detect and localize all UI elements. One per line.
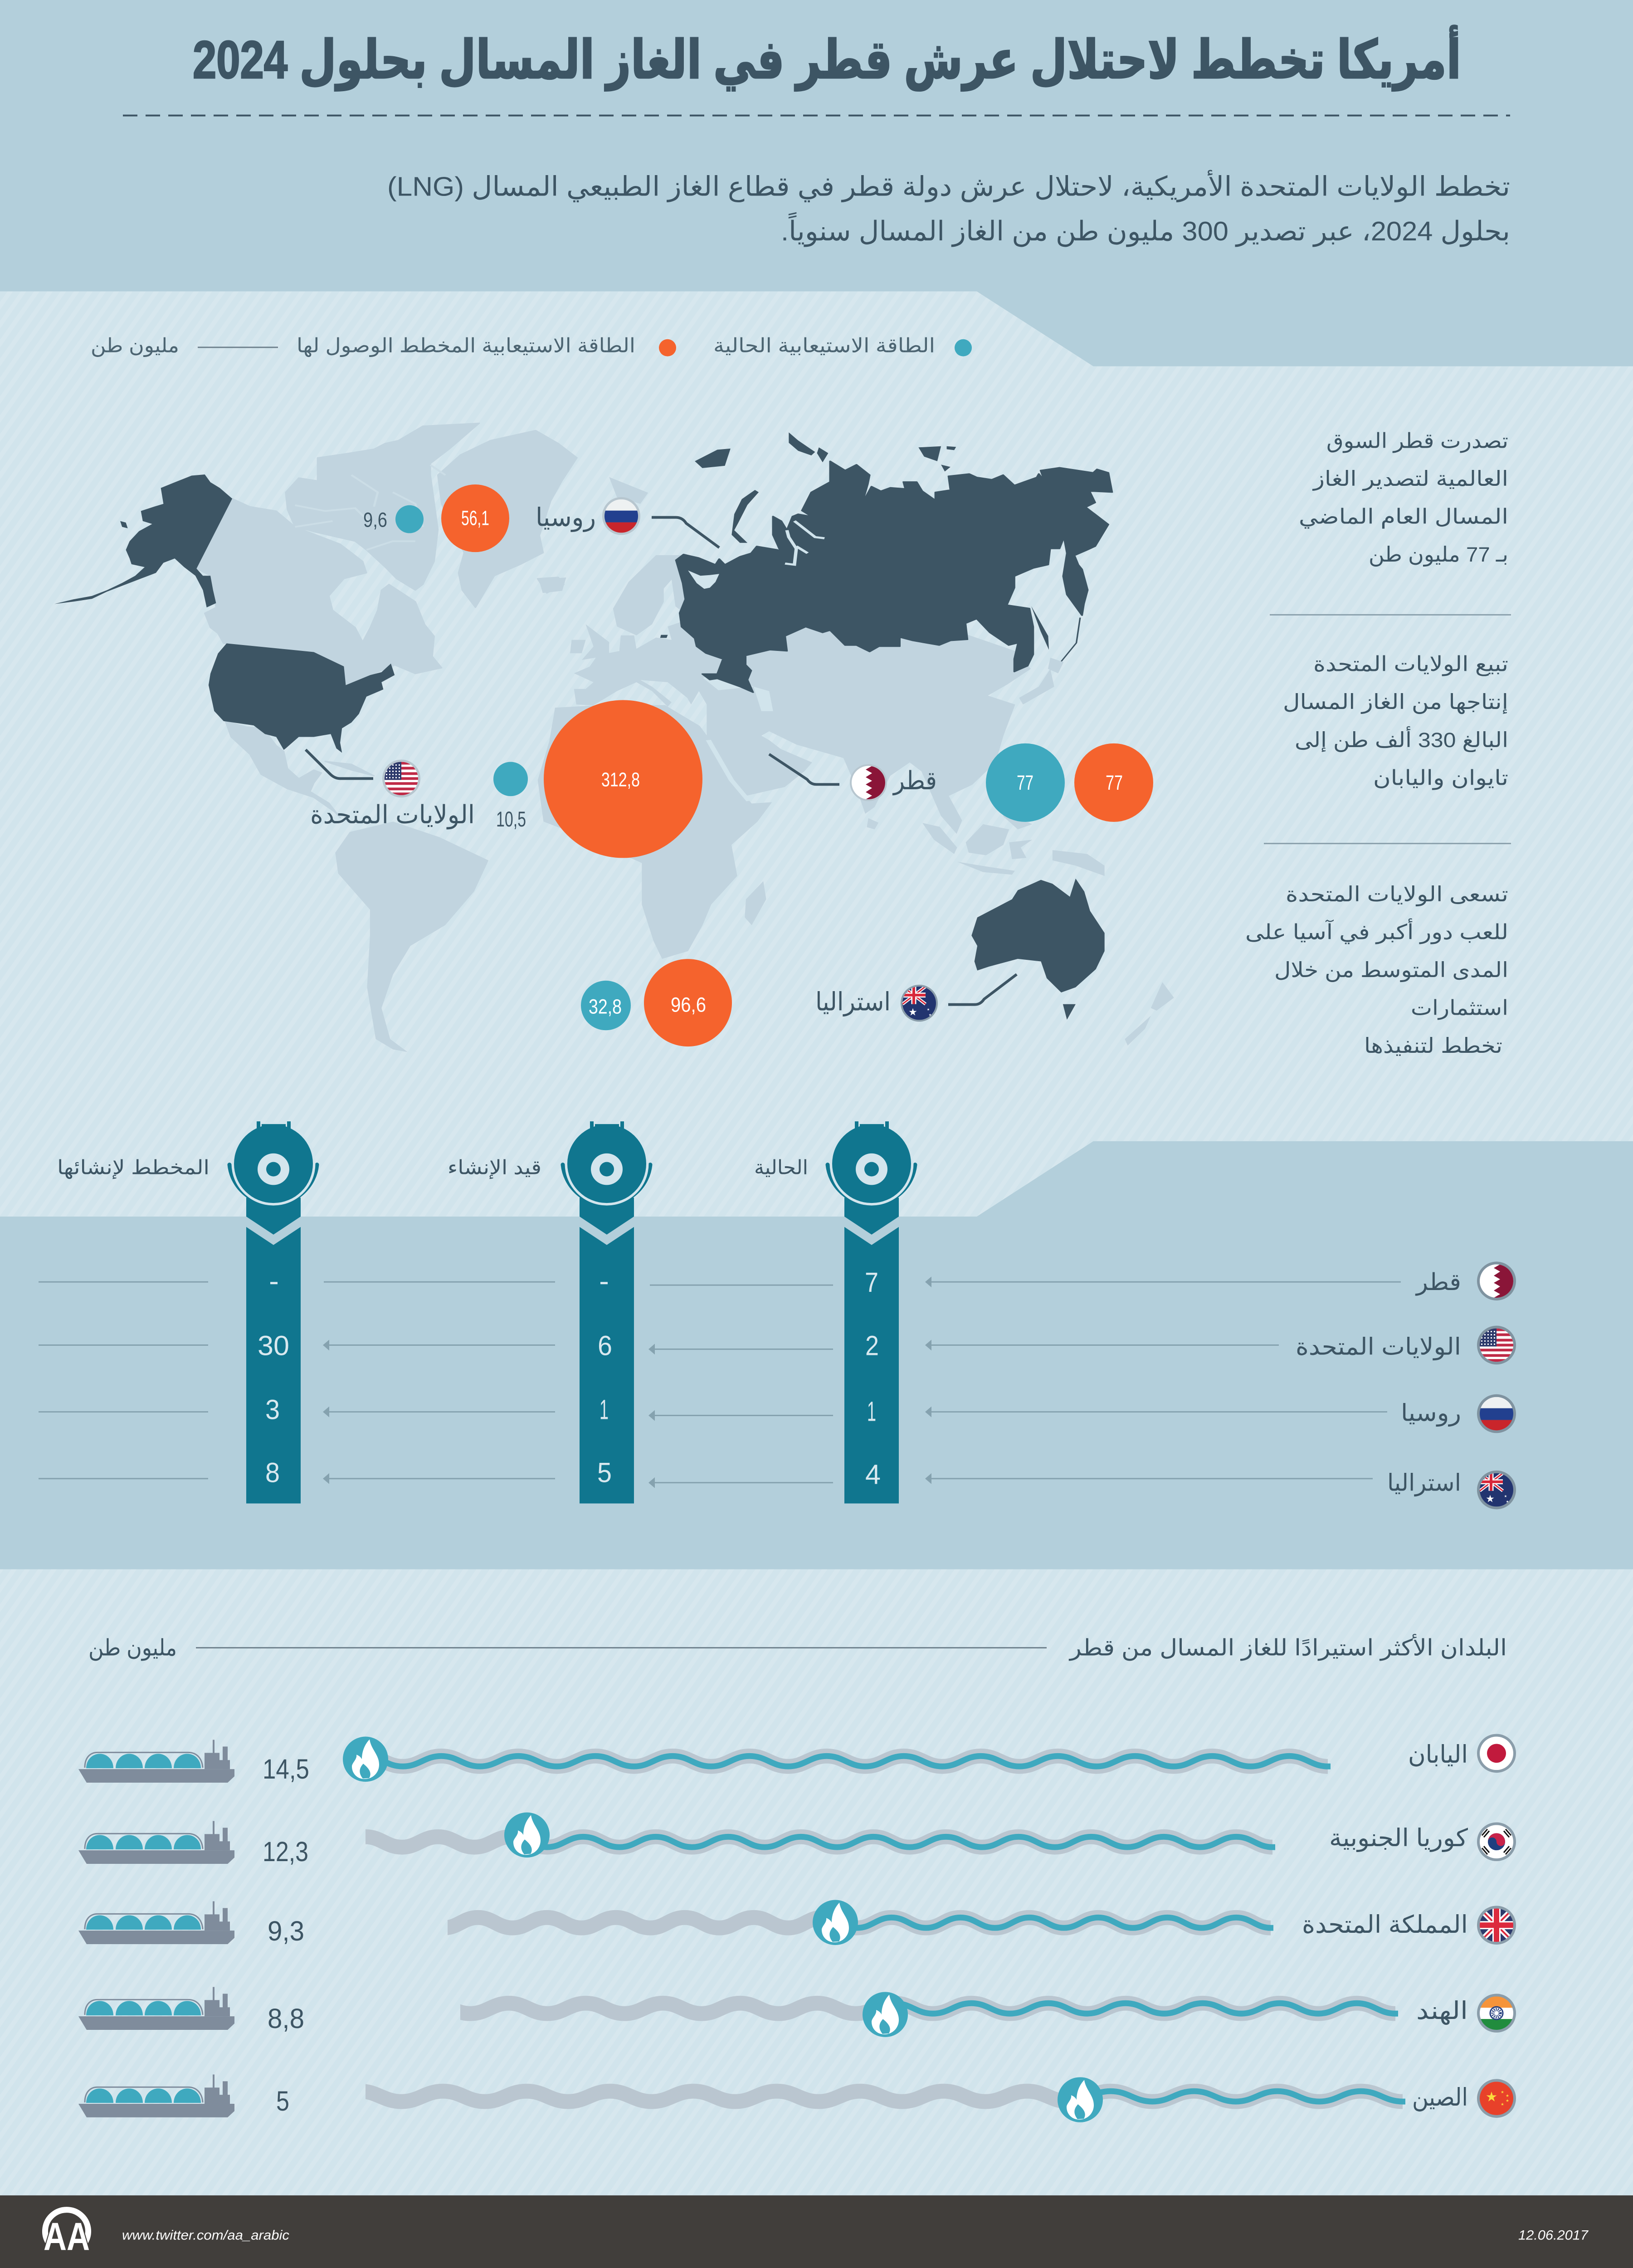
callout: qatar <box>769 743 1153 822</box>
column values <box>258 1267 881 1491</box>
text block: qatar exports: المسال العام الماضي <box>1299 505 1508 529</box>
row: china: الصين <box>1412 2084 1468 2112</box>
text block: us sales: تبيع الولايات المتحدة <box>1313 652 1508 677</box>
footer <box>0 2195 1633 2268</box>
callout: united states: 312,8 <box>601 768 640 791</box>
chart heading: البلدان الأكثر استيرادًا للغاز المسال من قطر <box>1068 1634 1507 1661</box>
country row labels <box>1296 1261 1516 1509</box>
map: light land eurasia <box>539 477 1063 834</box>
text block: us sales: تايوان واليابان <box>1373 766 1508 790</box>
callout: australia: 32,8 <box>589 995 622 1018</box>
column values: 4 <box>865 1459 881 1491</box>
text block: us role in asia: تسعى الولايات المتحدة <box>1286 882 1508 907</box>
row: india <box>78 1987 1516 2037</box>
column values: 1 <box>600 1394 609 1425</box>
text block: qatar exports: بـ 77 مليون طن <box>1369 543 1508 567</box>
text block: us role in asia: تخطط لتنفيذها <box>1364 1034 1502 1057</box>
column values: 3 <box>265 1394 280 1425</box>
column headers: الحالية <box>754 1157 808 1178</box>
text block: qatar exports: تصدرت قطر السوق <box>1326 429 1508 453</box>
map: highlighted russia <box>660 432 1112 692</box>
row: japan <box>78 1734 1516 1785</box>
arrows between columns <box>39 1276 1401 1488</box>
footer date: 12.06.2017 <box>1518 2228 1589 2243</box>
intro text <box>387 170 1510 247</box>
callout: australia <box>581 959 1017 1046</box>
panel: light map area <box>0 291 1633 1217</box>
legend: الطاقة الاستيعابية المخطط الوصول لها <box>297 335 635 357</box>
country row labels: روسيا <box>1401 1400 1461 1427</box>
chart heading <box>88 1634 1507 1661</box>
map: highlighted australia <box>971 879 1105 1020</box>
text block: us role in asia: للعب دور أكبر في آسيا على <box>1245 919 1508 944</box>
intro text: بحلول 2024، عبر تصدير 300 مليون طن من الغاز المسال سنوياً. <box>781 212 1510 247</box>
panel: light chart area <box>0 1569 1633 2196</box>
map: light land americas north <box>196 423 577 817</box>
column headers: قيد الإنشاء <box>448 1157 541 1179</box>
row: china: 5 <box>276 2086 289 2117</box>
callout: qatar: 77 <box>1106 771 1123 794</box>
row: south korea: كوريا الجنوبية <box>1329 1824 1468 1852</box>
country row labels: الولايات المتحدة <box>1296 1333 1461 1360</box>
text block: us role in asia: استثمارات <box>1411 996 1508 1020</box>
legend <box>91 335 972 357</box>
column values: 8 <box>265 1457 280 1489</box>
text block: qatar exports: العالمية لتصدير الغاز <box>1312 467 1508 491</box>
country row labels: قطر <box>1415 1269 1461 1296</box>
legend: الطاقة الاستيعابية الحالية <box>713 335 935 357</box>
column values: 1 <box>867 1396 876 1427</box>
column headers: المخطط لإنشائها <box>57 1157 210 1179</box>
pipe column: current <box>828 1121 915 1503</box>
row: united kingdom: المملكة المتحدة <box>1302 1911 1468 1938</box>
column values: 2 <box>865 1330 879 1361</box>
callout: united states: الولايات المتحدة <box>310 800 475 830</box>
callout: russia: 9,6 <box>363 508 387 531</box>
icon: agency logo: AA <box>44 2214 90 2258</box>
row: india: 8,8 <box>268 2003 304 2034</box>
row: south korea <box>78 1813 1516 1867</box>
row: south korea: 12,3 <box>263 1836 308 1867</box>
row: united kingdom: 9,3 <box>268 1916 304 1947</box>
world map <box>54 423 1174 1052</box>
callout: russia <box>363 484 719 552</box>
column values: 30 <box>258 1330 289 1361</box>
callout: australia: 96,6 <box>671 993 706 1016</box>
pipe column: under construction <box>563 1121 650 1503</box>
map: light land south america africa oceania <box>335 705 1174 1052</box>
text block: us role in asia: المدى المتوسط من خلال <box>1274 958 1508 982</box>
pipe column: planned <box>229 1121 317 1503</box>
callout: qatar: قطر <box>892 766 937 796</box>
row: japan: 14,5 <box>263 1754 309 1785</box>
row: india: الهند <box>1416 1997 1468 2025</box>
title divider <box>123 115 1510 117</box>
row: japan: اليابان <box>1408 1741 1468 1768</box>
map: highlighted alaska and united states <box>54 474 395 753</box>
row: china <box>78 2074 1516 2122</box>
callout: russia: 56,1 <box>461 506 489 529</box>
text block: us sales: البالغ 330 ألف طن إلى <box>1295 726 1508 753</box>
callout: united states: 10,5 <box>496 807 526 831</box>
text block: qatar exports <box>1299 429 1508 567</box>
row: united kingdom <box>78 1900 1516 1947</box>
callout: australia: استراليا <box>815 987 891 1017</box>
column headers <box>57 1157 808 1179</box>
callout: united states <box>306 700 702 858</box>
legend: مليون طن <box>91 335 179 357</box>
text block: us role in asia <box>1245 882 1508 1057</box>
callout: qatar: 77 <box>1017 771 1033 794</box>
chart heading: مليون طن <box>88 1635 177 1661</box>
intro text: تخطط الولايات المتحدة الأمريكية، لاحتلال عرش دولة قطر في قطاع الغاز الطبيعي المسال (LNG) <box>387 170 1510 203</box>
column values: 5 <box>597 1457 612 1489</box>
column values: 6 <box>598 1330 612 1361</box>
text block: us sales: إنتاجها من الغاز المسال <box>1283 690 1508 714</box>
footer link: www.twitter.com/aa_arabic <box>122 2228 289 2243</box>
text block: us sales <box>1283 652 1508 790</box>
country row labels: استراليا <box>1387 1470 1461 1497</box>
column values: 7 <box>865 1267 878 1298</box>
callout: russia: روسيا <box>536 503 596 532</box>
